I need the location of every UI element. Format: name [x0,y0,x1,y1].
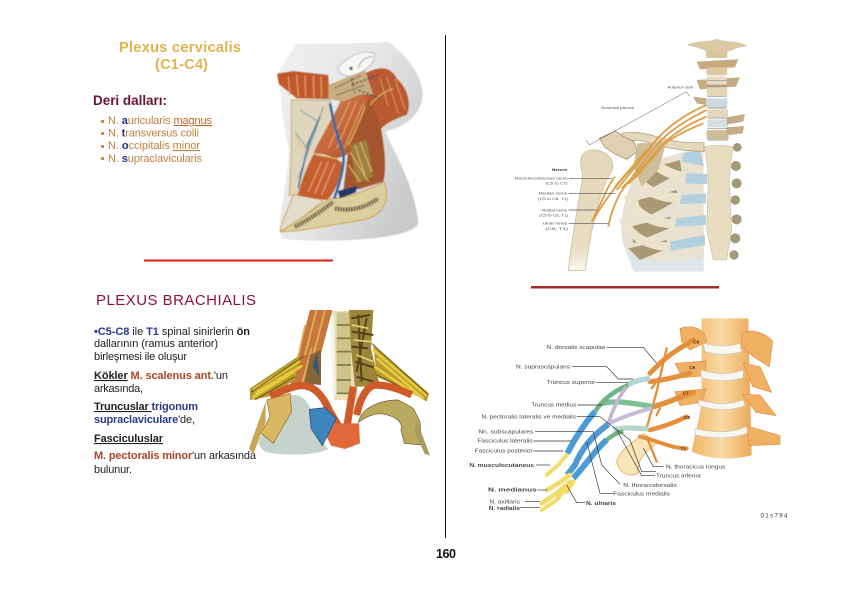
labels with leader lines [515,85,693,231]
vertebra labels: C6 [689,365,696,370]
spine column [331,311,358,400]
nerve labels: N. axillaris [489,500,520,506]
right neck nerves and ganglia [349,310,380,387]
intercostal shading [628,160,682,260]
front ribs [623,157,687,247]
nerve labels [469,345,725,512]
nerve labels: N. radialis [489,506,520,512]
paragraph: roots: arkasında, [94,383,143,395]
humerus [568,150,613,271]
paragraph: origin: birleşmesi ile oluşur [94,351,187,363]
trunks pale and green [595,378,653,442]
intervertebral discs [695,343,747,438]
nerve roots orange [640,340,693,462]
right brachial nerves [373,345,429,402]
left brachial nerves [250,355,300,400]
paragraph: cords: bulunur. [94,464,132,476]
list: cutaneous branches [101,115,212,165]
labels with leader lines: Radial nerve [542,207,568,212]
list: cutaneous branches: N. occipitalis minor [108,140,200,152]
vertebra labels: C5 [693,339,700,344]
illustration: thoracic inlet dissection [249,310,430,456]
deep triangle [343,98,385,190]
leader lines [520,347,663,508]
blue vein [330,103,344,198]
list: cutaneous branches: N. auricularis magnus [108,115,212,127]
posterior upper muscle [362,68,409,130]
transverse processes [675,327,780,446]
nerve labels: Fasciculus posterior [475,449,533,455]
text block: brachial plexus description [94,326,257,476]
labels with leader lines: Anterior rami [667,85,693,90]
sternocleidomastoid muscle [313,92,370,159]
vertebral column [692,318,752,459]
nerve labels: Fasciculus medialis [613,491,670,497]
neck skin silhouette [278,42,423,241]
list: cutaneous branches: N. transversus colli [108,128,199,140]
costal cartilage [670,151,707,251]
paragraph: cords [94,433,257,476]
paragraph: origin [94,326,250,363]
illustration: brachial plexus diagram [469,318,788,519]
list: cutaneous branches: N. supraclavicularis [108,153,202,165]
vertebra labels: T1 [681,446,686,451]
cords blue [567,412,608,478]
paragraph: trunks: Truncuslar trigonum [94,401,198,413]
labels with leader lines: (C8, T1) [545,226,569,231]
paragraph: roots: Kökler M. scalenus ant.'un [94,370,228,382]
divider: red rule right [531,286,719,288]
vertebra labels: C8 [684,415,690,420]
dissected pale fascia [289,100,335,195]
subclavian arteries [270,385,412,428]
heading: PLEXUS BRACHIALIS: PLEXUS BRACHIALIS [96,292,256,309]
labels with leader lines: (C5 to C8, T1) [538,196,569,201]
vertebra labels [681,339,700,451]
aortic arch [327,423,360,449]
nerve labels: Nn. subscapulares [478,429,533,435]
divider: vertical centre line [445,35,446,538]
right side ribs stubs [729,143,742,260]
clavicle [622,132,704,151]
labels with leader lines: Ulnar nerve [543,221,568,226]
nerve labels: Truncus superior [547,380,595,386]
rib stub [617,433,657,475]
nerve labels: N. pectoralis lateralis ve medialis [481,414,576,420]
cervical vertebrae [687,39,747,140]
paragraph: roots [94,370,228,395]
paragraph: trunks [94,401,198,426]
paragraph: origin: •C5-C8 ile T1 spinal sinirlerin ön [94,326,250,338]
vertebra labels: C7 [683,390,689,395]
figure code: 01s794 [761,513,788,519]
title: Plexus cervicalis [119,40,241,73]
nerve labels: N. thoracodorsalis [623,483,677,489]
blue vein heart [309,408,336,446]
nerve labels: Truncus inferior [656,474,701,480]
terminal branches yellow [542,455,573,510]
title: Plexus cervicalis: (C1-C4) [155,57,208,73]
lower pale pleura [625,250,704,272]
labels with leader lines: Musculocutaneous nerve [515,175,569,180]
nerve labels: Truncus medius [531,403,576,409]
nerve labels: N. medianus [488,488,537,494]
scapular yellow bones left [261,393,292,443]
left neck muscles [290,310,332,387]
nerve labels: N. musculocutaneus [469,463,534,469]
title: Plexus cervicalis: Plexus cervicalis [119,40,241,56]
ear [338,52,375,76]
sternum [704,145,733,260]
paragraph: cords: M. pectoralis minor'un arkasında [94,450,257,462]
scapula and acromion [599,131,637,159]
divider: red rule left [144,260,333,262]
paragraph: origin: dallarının (ramus anterior) [94,338,218,350]
page number: 160 [436,547,456,561]
illustration: neck dissection [277,42,423,241]
paragraph: cords: Fasciculuslar [94,433,164,445]
labels with leader lines: Nerves [552,167,568,172]
nerve labels: N. thoracicus longus [666,465,725,471]
labels with leader lines: Median nerve [539,191,568,196]
paragraph: trunks: supraclaviculare'de, [94,414,195,426]
right rib and shoulder [358,400,422,445]
lower jaw muscle band [277,71,330,99]
labels with leader lines: (C5 to C7) [546,180,568,185]
nerve labels: Fasciculus lateralis [477,439,533,445]
nerve labels: N. dorsalis scapulae [547,345,605,351]
heading: Deri dalları: Deri dalları: [93,93,167,108]
lung [259,395,328,455]
labels with leader lines: (C5 to C8, T1) [539,213,569,218]
nerve labels: N. ulnaris [586,501,616,507]
labels with leader lines: Brachial plexus [601,105,634,110]
nerves: brachial plexus [592,105,707,227]
yellow nerves [295,88,393,159]
illustration: shoulder and brachial plexus skeleton [515,39,747,272]
nerve labels: N. suprascapularis [516,365,570,371]
rib cage backing [621,147,704,263]
